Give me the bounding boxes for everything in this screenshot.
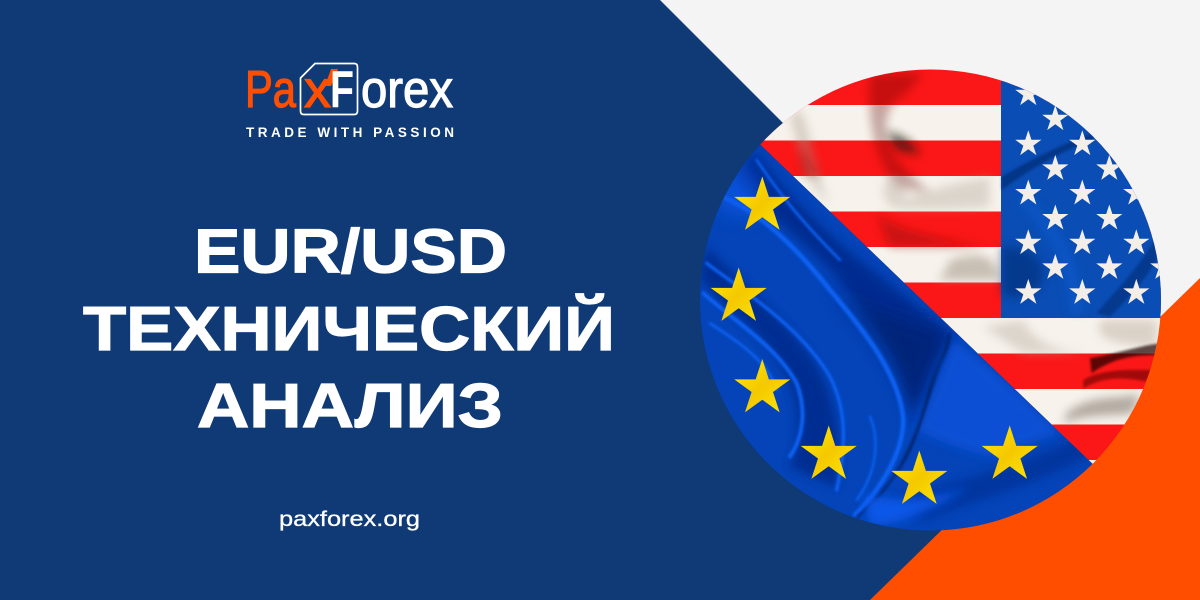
EU fold shading [700, 153, 1093, 530]
logo letter F: F [330, 61, 354, 119]
EU blue base [700, 144, 1093, 530]
US stars [1015, 90, 1160, 304]
logo tagline: TRADE WITH PASSION [246, 125, 454, 140]
logo slash [325, 69, 338, 86]
canton folds [1002, 133, 1157, 317]
title line 2: ТЕХНИЧЕСКИЙ [83, 294, 615, 364]
logo frame [300, 64, 358, 114]
website url: paxforex.org [279, 508, 420, 531]
canton [1001, 80, 1161, 318]
flag circle [700, 70, 1161, 530]
background: orange corner [870, 278, 1200, 600]
blue folds highlights [703, 160, 903, 515]
white stripes [764, 105, 1160, 464]
title line 3: АНАЛИЗ [197, 372, 503, 441]
EU flag half [700, 144, 1093, 530]
logo wordmark right: orex [361, 61, 453, 119]
red base [760, 70, 1161, 464]
stripe fold shading [790, 73, 1160, 423]
logo: PaxForex [245, 61, 454, 140]
US flag half [760, 70, 1161, 464]
logo wordmark left: Pa [245, 61, 296, 119]
logo letter x: x [304, 61, 331, 119]
title [83, 218, 615, 441]
EU stars [711, 176, 1038, 504]
title line 1: EUR/USD [194, 218, 507, 286]
